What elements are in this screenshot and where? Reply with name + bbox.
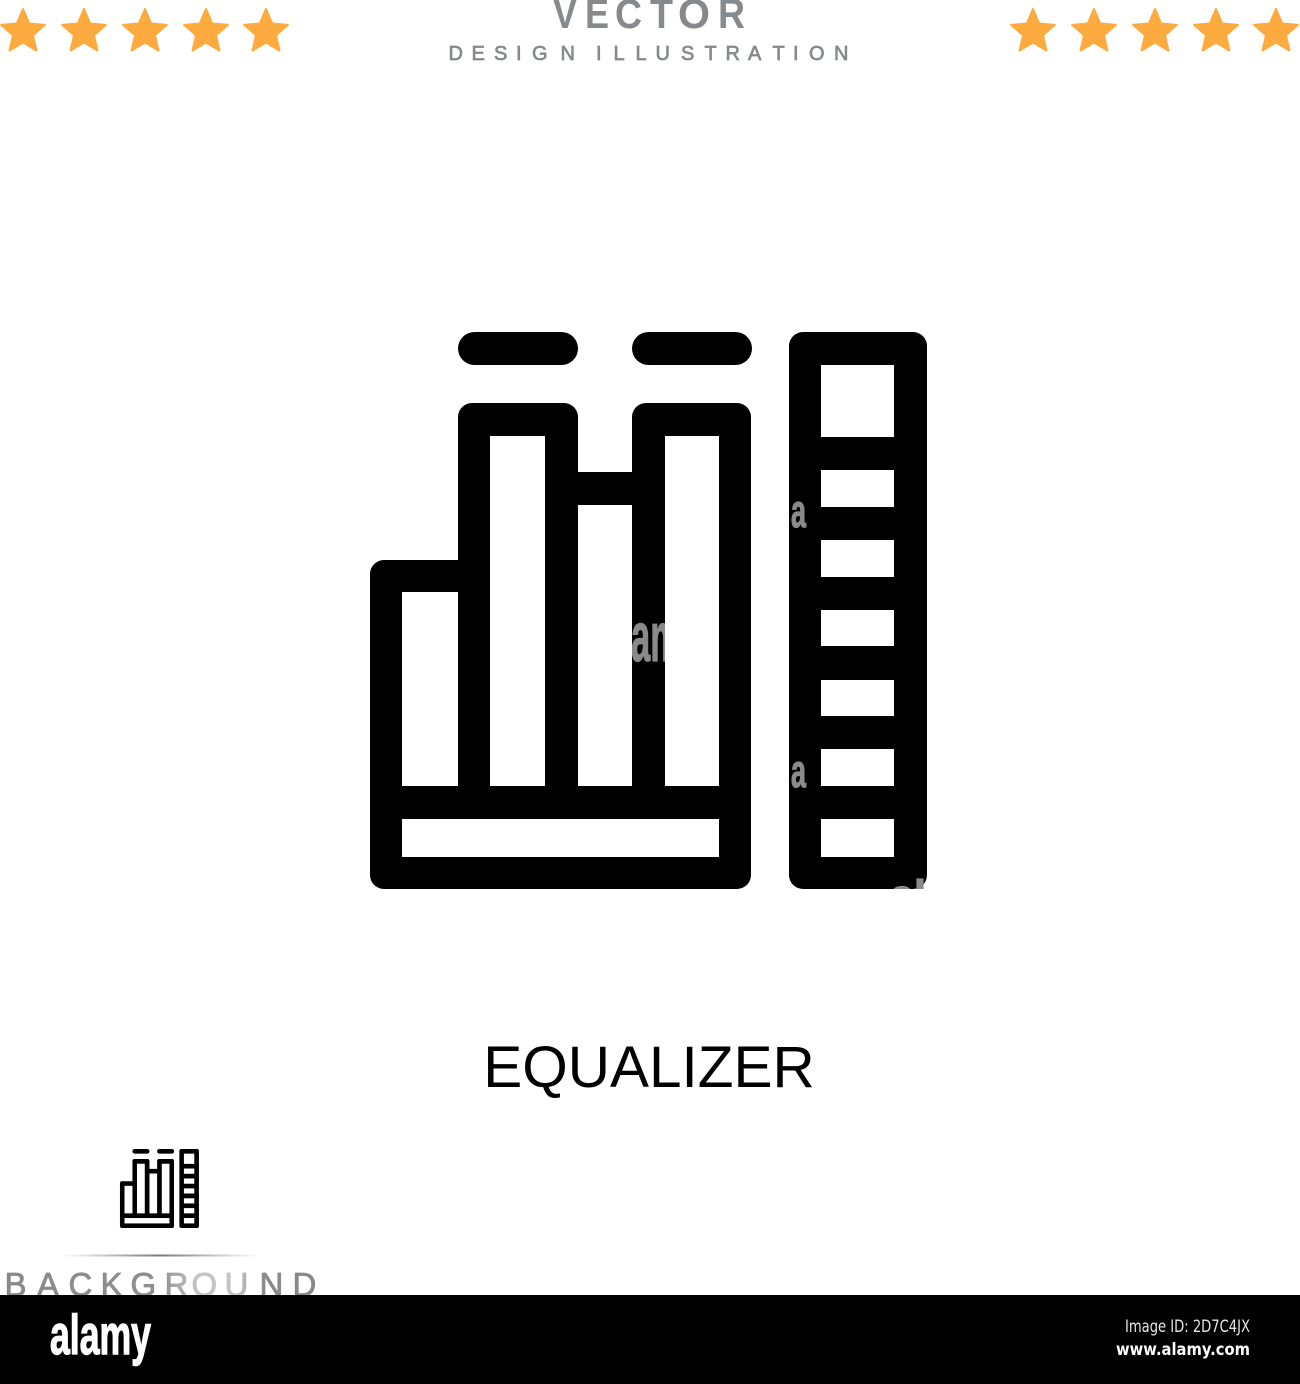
star 2 (62, 9, 106, 51)
small meter column (179, 1149, 199, 1228)
website url: www.alamy.com (1116, 1340, 1250, 1360)
right rating stars (1011, 9, 1298, 51)
image id: Image ID: 2D7C4JX (1125, 1317, 1250, 1336)
heading: vector (554, 0, 744, 28)
star 4 (184, 9, 228, 51)
watermark fragments: a (791, 485, 806, 537)
star 2 (1072, 9, 1116, 51)
star 1 (1, 9, 45, 51)
small bar interiors (125, 1164, 169, 1223)
title: equalizer: EQUALIZER (483, 1035, 815, 1100)
icon: small equalizer (120, 1149, 199, 1228)
level meter column (789, 332, 927, 889)
bar interiors (402, 436, 719, 857)
top level pills (458, 332, 752, 365)
star 1 (1011, 9, 1055, 51)
watermark fragments: am (631, 598, 681, 676)
icon: large equalizer (370, 332, 927, 917)
star 3 (123, 9, 167, 51)
star 5 (244, 9, 288, 51)
small bar outline (120, 1159, 174, 1228)
watermark fragments (632, 501, 924, 889)
star 4 (1194, 9, 1238, 51)
divider rule (60, 1254, 260, 1256)
label: background: BACKGROUND (4, 1266, 316, 1303)
watermark fragments: al (890, 873, 926, 917)
subheading: design illustration: DESIGN ILLUSTRATION (448, 43, 848, 65)
left rating stars (1, 9, 288, 51)
logo: alamy: alamy (50, 1303, 151, 1366)
star 5 (1254, 9, 1298, 51)
level meter cells (821, 365, 894, 857)
star 3 (1133, 9, 1177, 51)
bar group outline (370, 403, 751, 889)
small level pills (132, 1149, 174, 1154)
watermark fragments: a (791, 745, 806, 797)
small meter cells (184, 1154, 194, 1223)
footer bar (0, 1295, 1300, 1384)
